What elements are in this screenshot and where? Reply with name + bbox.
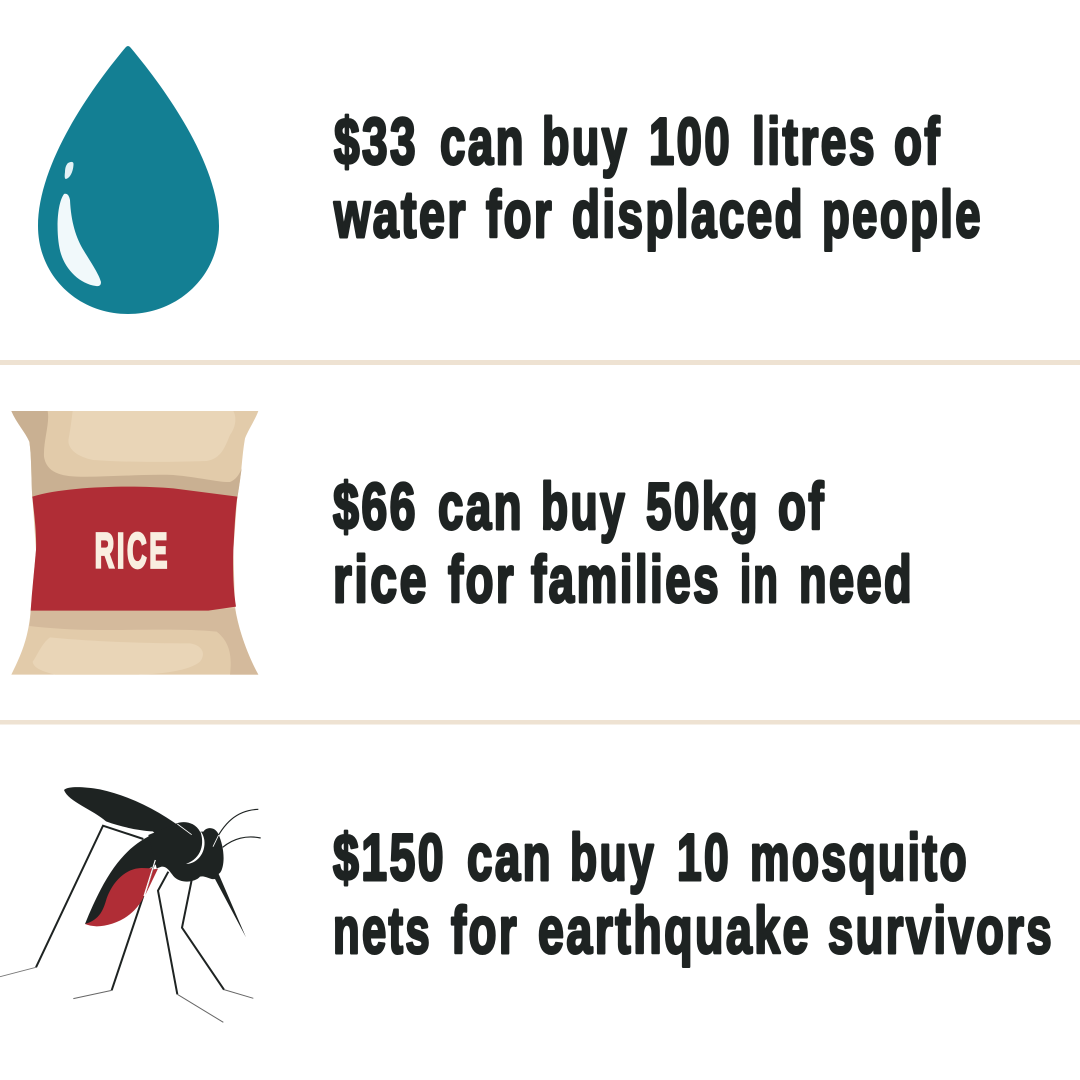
text: rice donation	[333, 469, 914, 616]
text: water donation: buy	[542, 104, 629, 178]
icon: rice sack: RICE	[95, 523, 170, 578]
text: rice donation: rice	[333, 542, 429, 616]
text: mosquito net donation: 10	[677, 820, 731, 894]
text: water donation: 100	[649, 104, 732, 178]
mosquito thorax and head	[148, 822, 246, 937]
text: rice donation: buy	[541, 469, 627, 543]
text: water donation: can	[440, 104, 526, 178]
text: rice donation: $66	[333, 469, 418, 543]
text: rice donation: can	[438, 469, 524, 543]
icon: mosquito	[0, 787, 261, 1022]
text: rice donation: in	[740, 542, 780, 616]
text: water donation: people	[822, 177, 983, 251]
text: mosquito net donation: nets	[333, 893, 432, 967]
text: rice donation: of	[778, 469, 826, 543]
text: mosquito net donation	[333, 820, 1054, 967]
text: rice donation: for	[448, 542, 516, 616]
mosquito wing	[64, 787, 187, 847]
text: water donation: $33	[334, 104, 418, 178]
text: mosquito net donation: earthquake	[538, 893, 811, 967]
text: rice donation: need	[799, 542, 914, 616]
text: water donation	[333, 104, 983, 251]
text: rice donation: families	[531, 542, 721, 616]
text: mosquito net donation: can	[467, 820, 553, 894]
icon: rice sack	[11, 411, 258, 675]
text: mosquito net donation: buy	[570, 820, 656, 894]
text: water donation: displaced	[572, 177, 805, 251]
text: water donation: litres	[752, 104, 877, 178]
text: rice donation: 50kg	[646, 469, 760, 543]
text: mosquito net donation: $150	[333, 820, 446, 894]
text: mosquito net donation: for	[451, 893, 519, 967]
text: water donation: of	[894, 104, 942, 178]
mosquito abdomen	[85, 833, 163, 924]
text: water donation: for	[486, 177, 554, 251]
text: mosquito net donation: mosquito	[750, 820, 969, 894]
text: water donation: water	[333, 177, 468, 251]
icon: water drop	[38, 46, 219, 314]
mosquito blood	[85, 868, 153, 926]
